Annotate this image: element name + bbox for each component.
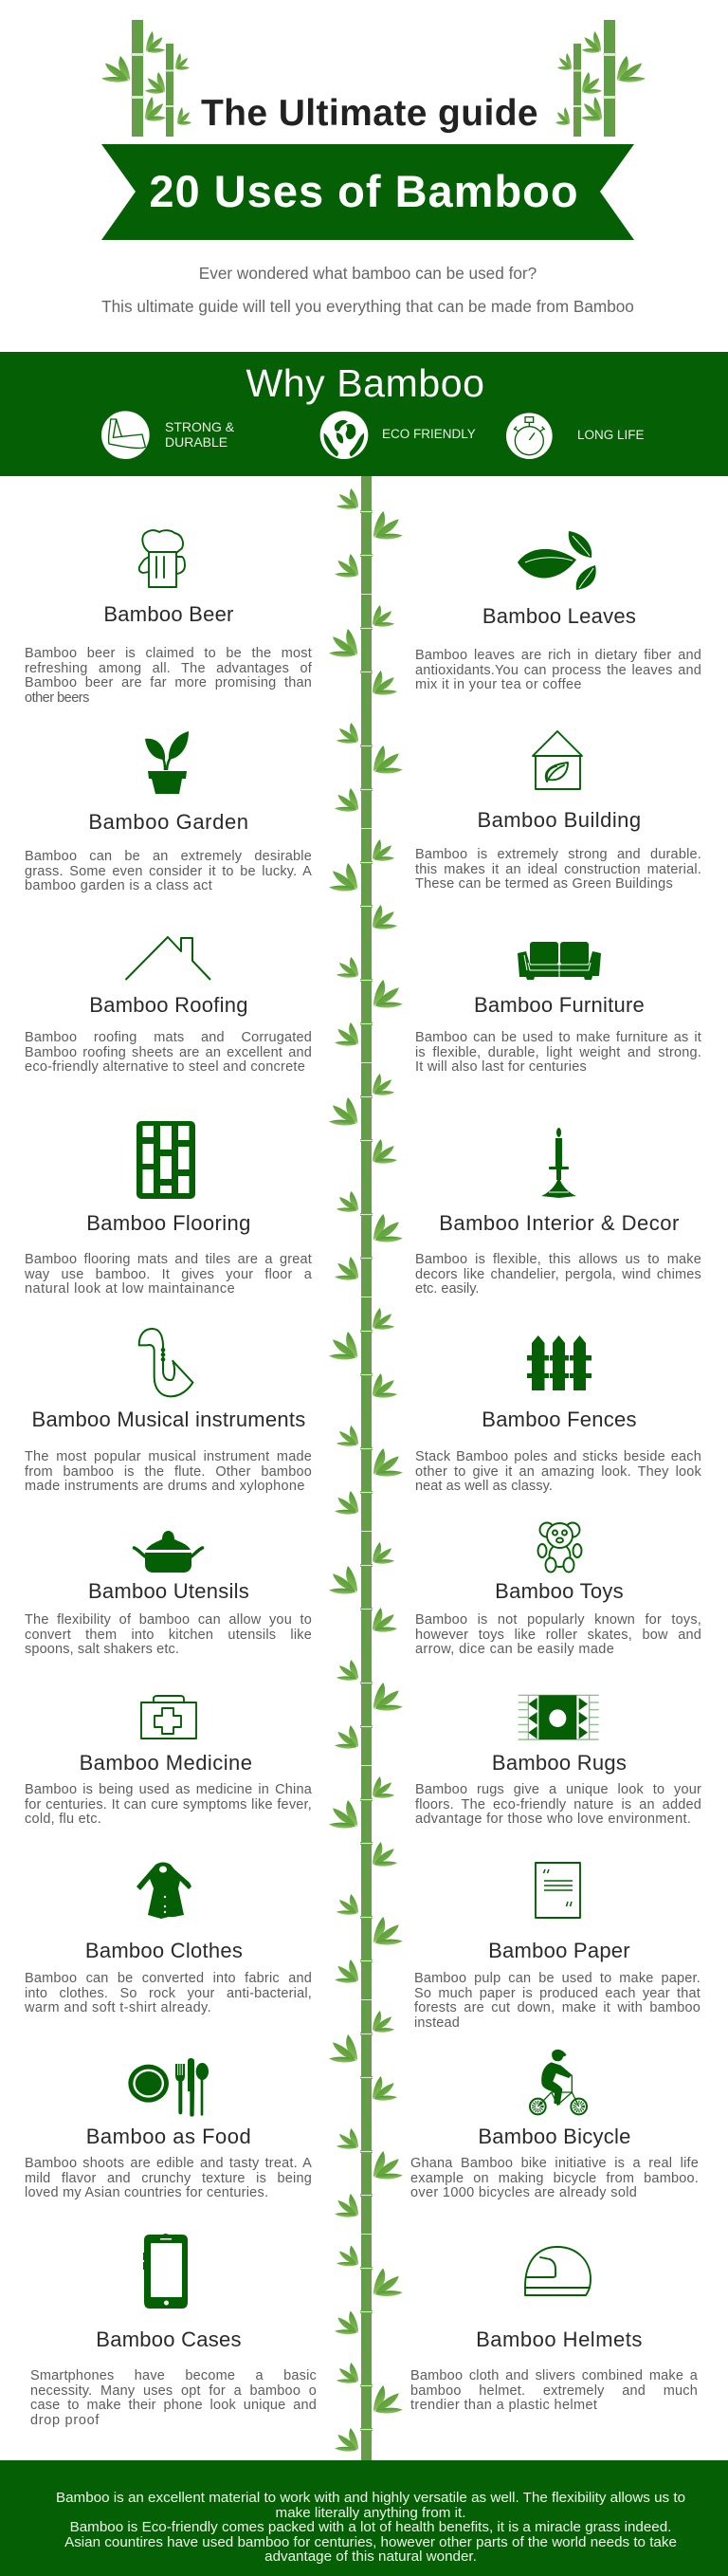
text: summary: advantage of this natural wonder.: [264, 2548, 477, 2565]
text: Bamboo rugs give a unique look to your: [415, 1782, 701, 1797]
icon: medicine case: [140, 1695, 197, 1739]
text: summary: [0, 2491, 728, 2565]
icon: eco globe: [320, 411, 368, 459]
text: example on making bicycle from bamboo.: [410, 2170, 699, 2185]
heading: Bamboo Flooring: [86, 1211, 251, 1235]
text: Bamboo beer is claimed to be the most: [25, 646, 312, 661]
text: [414, 1972, 701, 2031]
icon: teddy bear: [537, 1521, 582, 1573]
icon: potted plant: [145, 731, 189, 794]
text: necessity. Many uses opt for a bamboo o: [30, 2383, 317, 2398]
text: natural look at low maintainance: [25, 1281, 235, 1297]
heading: Bamboo Leaves: [482, 604, 636, 628]
text: Bamboo can be used to make furniture as it: [415, 1030, 701, 1045]
label: strong and durable: [165, 419, 234, 450]
icon: right bamboo cluster: [555, 20, 646, 137]
text: etc. easily.: [415, 1281, 479, 1297]
text: Bamboo shoots are edible and tasty treat. A: [25, 2156, 312, 2171]
text: summary: make literally anything from it.: [276, 2504, 465, 2521]
icon: smartphone: [143, 2234, 188, 2309]
text: [415, 1613, 701, 1658]
icon: coat: [136, 1862, 191, 1919]
text: Bamboo is flexible, this allows us to make: [415, 1252, 701, 1267]
icon: child on bicycle: [521, 2045, 597, 2121]
central bamboo stalk: [329, 476, 403, 2460]
text: advantage for those who love environment.: [415, 1812, 691, 1827]
text: [25, 1449, 312, 1494]
panel: Bamboo Clothes: [19, 1862, 327, 2016]
text: [415, 847, 701, 892]
title: The Ultimate guide: [201, 93, 538, 134]
heading: Bamboo Beer: [103, 602, 234, 626]
text: Bamboo cloth and slivers combined make a: [410, 2368, 698, 2383]
heading: Bamboo Building: [477, 808, 642, 832]
text: So much paper is produced each year that: [414, 1986, 701, 2001]
text: cold, flu etc.: [25, 1812, 101, 1827]
text: floors. The eco-friendly nature is an added: [415, 1796, 701, 1812]
text: into clothes. So rock your anti-bacterial,: [25, 1986, 312, 2001]
text: Bamboo pulp can be used to make paper.: [414, 1971, 701, 1986]
text: [415, 1030, 701, 1075]
icon: left bamboo cluster: [101, 20, 191, 137]
intro text: This ultimate guide will tell you everything that can be made from Bamboo: [101, 297, 634, 316]
panel: Bamboo Helmets: [406, 2246, 709, 2417]
panel: Bamboo Fences: [415, 1335, 701, 1494]
panel: Bamboo Paper: [406, 1862, 709, 2031]
text: [25, 1972, 312, 2016]
text: is flexible, durable, light weight and strong.: [415, 1045, 701, 1060]
icon: picket fence: [527, 1335, 592, 1390]
panel: Bamboo Rugs: [406, 1688, 709, 1828]
icon: candle: [541, 1128, 576, 1198]
text: Bamboo beer are far more promising than: [25, 675, 312, 690]
heading: Bamboo Furniture: [474, 993, 645, 1017]
text: other beers: [25, 690, 89, 706]
heading: Bamboo Medicine: [80, 1751, 252, 1775]
intro text: Ever wondered what bamboo can be used for?: [199, 264, 537, 283]
heading: Bamboo Interior & Decor: [439, 1211, 680, 1235]
text: neat as well as classy.: [415, 1479, 553, 1494]
icon: helmet: [524, 2246, 592, 2296]
text: decors like chandelier, pergola, wind chimes: [415, 1267, 701, 1282]
panel: Bamboo Beer: [25, 529, 312, 706]
text: Bamboo leaves are rich in dietary fiber and: [415, 648, 701, 663]
text: instead: [414, 2015, 460, 2030]
text: [25, 1252, 312, 1297]
text: this makes it an ideal construction material.: [415, 861, 701, 876]
text: [415, 1252, 701, 1297]
heading: Bamboo Paper: [488, 1939, 630, 1962]
text: forests are cut down, make it with bamboo: [414, 2000, 701, 2015]
text: [30, 2369, 317, 2428]
icon: floor tiles: [136, 1121, 195, 1199]
icon: saxophone: [138, 1328, 194, 1398]
icon: cooking pot: [133, 1531, 204, 1573]
text: [415, 648, 701, 692]
text: [415, 1449, 701, 1494]
label: long life: LONG LIFE: [577, 428, 645, 442]
panel: Bamboo Musical instruments: [25, 1328, 312, 1494]
text: The flexibility of bamboo can allow you to: [25, 1612, 312, 1628]
label: strong and durable: DURABLE: [165, 434, 228, 450]
text: other to give it an amazing look. They look: [415, 1464, 701, 1480]
text: Stack Bamboo poles and sticks beside each: [415, 1449, 701, 1464]
icon: roof: [125, 936, 211, 981]
heading: Why Bamboo: Why Bamboo: [246, 361, 485, 405]
icon: green house: [532, 730, 583, 790]
panel: Bamboo as Food: [19, 2049, 327, 2200]
text: Bamboo roofing sheets are an excellent and: [25, 1045, 312, 1060]
text: Bamboo roofing mats and Corrugated: [25, 1030, 312, 1045]
heading: Bamboo Musical instruments: [32, 1408, 305, 1431]
text: Bamboo is extremely strong and durable.: [415, 847, 701, 862]
text: Bamboo flooring mats and tiles are a great: [25, 1252, 312, 1267]
text: [25, 1613, 312, 1658]
text: summary: Asian countires have used bamboo for centuries, however other parts of the world needs to take: [64, 2534, 677, 2549]
text: warm and soft t-shirt already.: [25, 2000, 211, 2015]
text: [25, 2157, 312, 2200]
heading: Bamboo Helmets: [476, 2328, 643, 2351]
text: Bamboo is being used as medicine in China: [25, 1782, 312, 1797]
heading: Bamboo Garden: [88, 810, 249, 834]
panel: Bamboo Building: [415, 730, 701, 892]
panel: Bamboo Flooring: [25, 1121, 312, 1297]
panel: Bamboo Utensils: [25, 1531, 312, 1657]
text: Bamboo can be converted into fabric and: [25, 1971, 312, 1986]
text: way use bamboo. It gives your floor a: [25, 1267, 312, 1282]
icon: plate and cutlery: [123, 2049, 218, 2121]
text: bamboo garden is a class act: [25, 878, 212, 893]
text: bamboo helmet. extremely and much: [410, 2383, 698, 2398]
text: however toys like roller skates, bow and: [415, 1628, 701, 1643]
text: mild flavor and crunchy texture is being: [25, 2170, 312, 2185]
text: Bamboo is not popularly known for toys,: [415, 1612, 701, 1628]
text: [25, 849, 312, 893]
panel: Bamboo Bicycle: [406, 2045, 709, 2200]
label: strong and durable: STRONG &: [165, 419, 234, 434]
panel: closing summary: [0, 2460, 728, 2576]
text: mix it in your tea or coffee: [415, 677, 582, 692]
text: arrow, dice can be easily made: [415, 1642, 614, 1657]
text: The most popular musical instrument made: [25, 1449, 312, 1464]
text: Smartphones have become a basic: [30, 2368, 317, 2383]
panel: Bamboo Roofing: [25, 936, 312, 1075]
text: Bamboo can be an extremely desirable: [25, 849, 312, 864]
text: summary: Bamboo is an excellent material to work with and highly versatile as well. The flexibility allows us to: [56, 2490, 685, 2506]
text: made instruments are drums and xylophone: [25, 1479, 305, 1494]
text: [25, 1030, 312, 1075]
banner: 20 Uses of Bamboo: 20 Uses of Bamboo: [149, 166, 579, 216]
icon: leaves: [518, 531, 596, 590]
heading: Bamboo Roofing: [89, 993, 248, 1017]
heading: Bamboo Toys: [495, 1579, 624, 1603]
text: [25, 1783, 312, 1827]
text: from bamboo is the flute. Other bamboo: [25, 1464, 312, 1480]
text: [410, 2369, 698, 2413]
panel: Bamboo Cases: [19, 2234, 327, 2429]
text: over 1000 bicycles are already sold: [410, 2185, 637, 2200]
heading: Bamboo Fences: [482, 1408, 637, 1431]
icon: rug: [512, 1688, 607, 1745]
icon: stopwatch: [506, 413, 553, 459]
panel: Why Bamboo: [0, 352, 728, 476]
label: eco friendly: ECO FRIENDLY: [382, 427, 476, 441]
text: refreshing among all. The advantages of: [25, 660, 312, 675]
text: eco-friendly alternative to steel and concrete: [25, 1059, 305, 1075]
heading: Bamboo as Food: [86, 2125, 251, 2148]
icon: sofa: [518, 942, 601, 980]
panel: Bamboo Garden: [25, 731, 312, 893]
intro text: [101, 264, 634, 316]
text: drop proof: [30, 2413, 100, 2428]
text: [415, 1783, 701, 1827]
text: summary: Bamboo is Eco-friendly comes packed with a lot of health benefits, it is a miracle grass indeed.: [70, 2519, 671, 2535]
heading: Bamboo Bicycle: [478, 2125, 631, 2148]
icon: beer mug: [138, 529, 186, 588]
panel: Bamboo Leaves: [415, 531, 701, 692]
icon: strong arm: [101, 411, 150, 459]
banner: 20 Uses of Bamboo: [101, 144, 634, 240]
heading: Bamboo Rugs: [492, 1751, 627, 1775]
text: It will also last for centuries: [415, 1059, 587, 1075]
icon: paper sheet: [535, 1862, 581, 1919]
heading: Bamboo Clothes: [85, 1939, 243, 1962]
panel: Bamboo Interior & Decor: [415, 1128, 701, 1297]
text: trendier than a plastic helmet: [410, 2398, 597, 2413]
text: antioxidants.You can process the leaves and: [415, 662, 701, 677]
text: for centuries. It can cure symptoms like fever,: [25, 1796, 312, 1812]
panel: Bamboo Furniture: [415, 942, 701, 1075]
text: [410, 2157, 699, 2200]
text: loved my Asian countries for centuries.: [25, 2185, 268, 2200]
panel: Bamboo Toys: [406, 1521, 709, 1658]
text: spoons, salt shakers etc.: [25, 1642, 179, 1657]
heading: Bamboo Cases: [96, 2328, 242, 2351]
panel: Bamboo Medicine: [19, 1695, 327, 1828]
text: grass. Some even consider it to be lucky. A: [25, 863, 312, 878]
text: case to make their phone look unique and: [30, 2398, 317, 2413]
text: These can be termed as Green Buildings: [415, 876, 673, 892]
text: convert them into kitchen utensils like: [25, 1628, 312, 1643]
text: [25, 646, 312, 706]
text: Ghana Bamboo bike initiative is a real life: [410, 2156, 699, 2171]
heading: Bamboo Utensils: [88, 1579, 249, 1603]
